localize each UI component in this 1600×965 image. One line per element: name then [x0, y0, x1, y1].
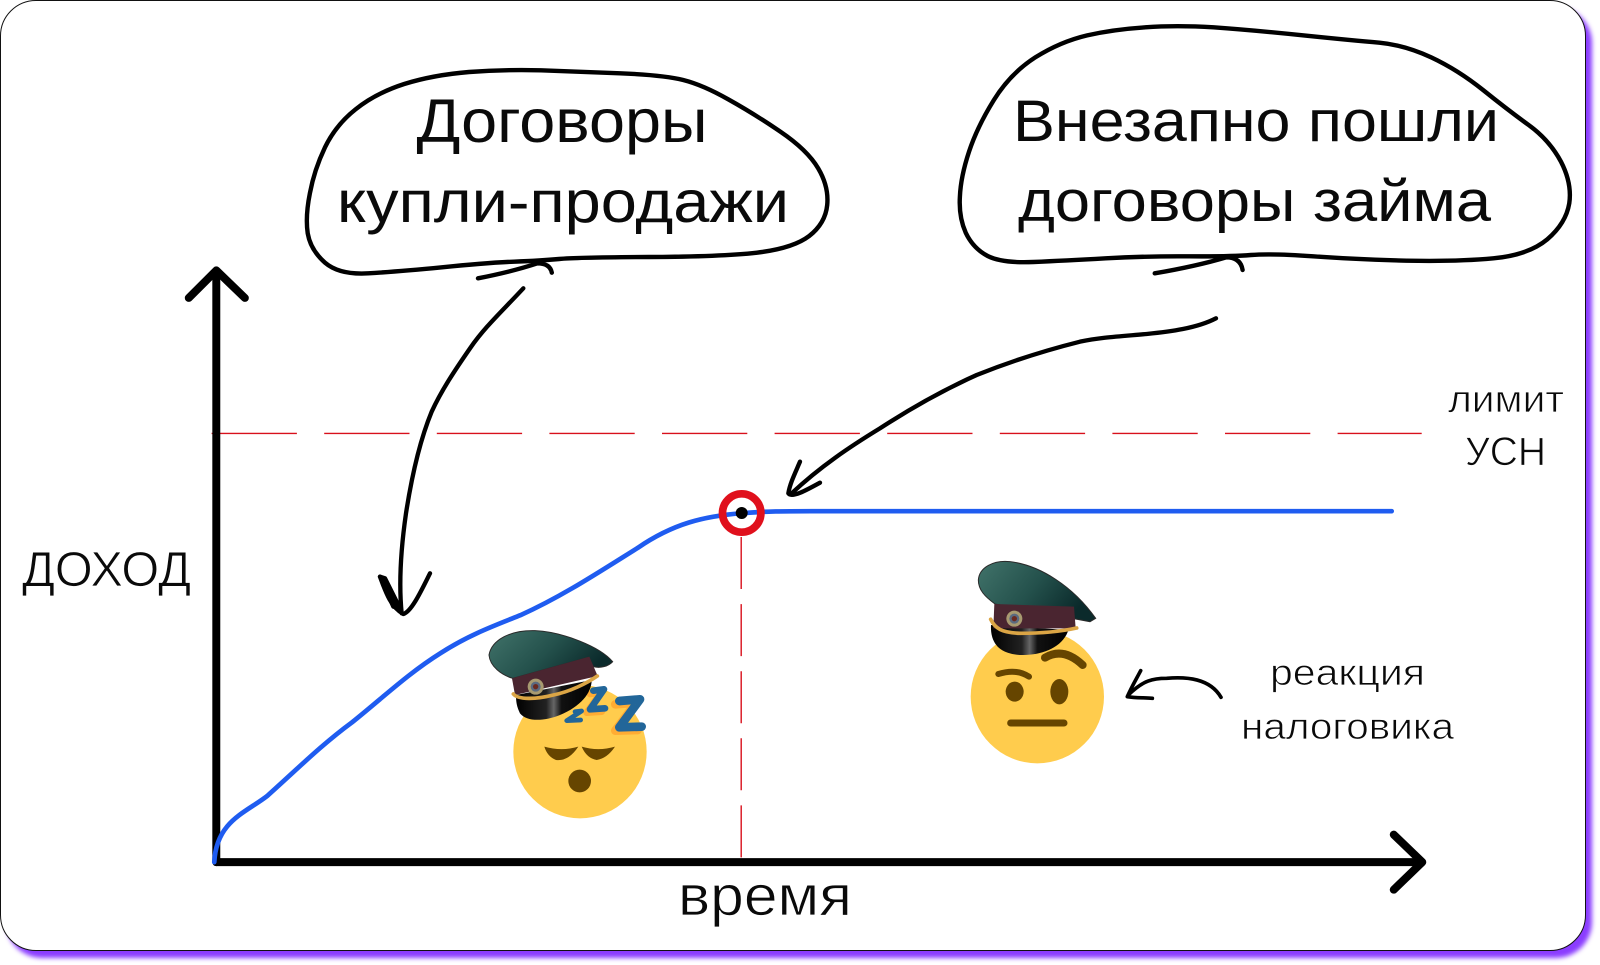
speech bubble: purchase contracts	[307, 70, 827, 278]
limit label	[1448, 379, 1564, 474]
marker circle	[722, 494, 761, 532]
bubble text: loan contracts	[1013, 89, 1499, 234]
income curve	[214, 511, 1392, 862]
y axis label: ДОХОД	[22, 543, 191, 597]
vertical marker line	[740, 537, 742, 858]
speech bubble: loan contracts	[960, 26, 1570, 273]
reaction label: налоговика	[1241, 706, 1454, 747]
bubble text: purchase contracts: Договоры	[416, 87, 708, 155]
bubble text: loan contracts: Внезапно пошли	[1013, 89, 1499, 154]
bubble text: purchase contracts: купли-продажи	[337, 169, 789, 235]
arrow: inspector reaction	[1127, 671, 1221, 698]
bubble text: loan contracts: договоры займа	[1018, 169, 1492, 234]
limit label: УСН	[1465, 430, 1546, 474]
x axis label: время	[678, 864, 852, 928]
icon: suspicious inspector	[971, 561, 1104, 763]
reaction label: реакция	[1270, 652, 1425, 693]
reaction label	[1241, 652, 1454, 747]
limit line	[212, 432, 1422, 434]
arrow: loan contracts to point	[788, 318, 1216, 495]
x axis arrow	[216, 835, 1422, 890]
y axis arrow	[189, 270, 245, 862]
arrow: purchase contracts to curve	[380, 288, 523, 614]
limit label: лимит	[1448, 379, 1564, 421]
bubble text: purchase contracts	[337, 87, 789, 235]
icon: sleeping inspector	[489, 631, 647, 818]
